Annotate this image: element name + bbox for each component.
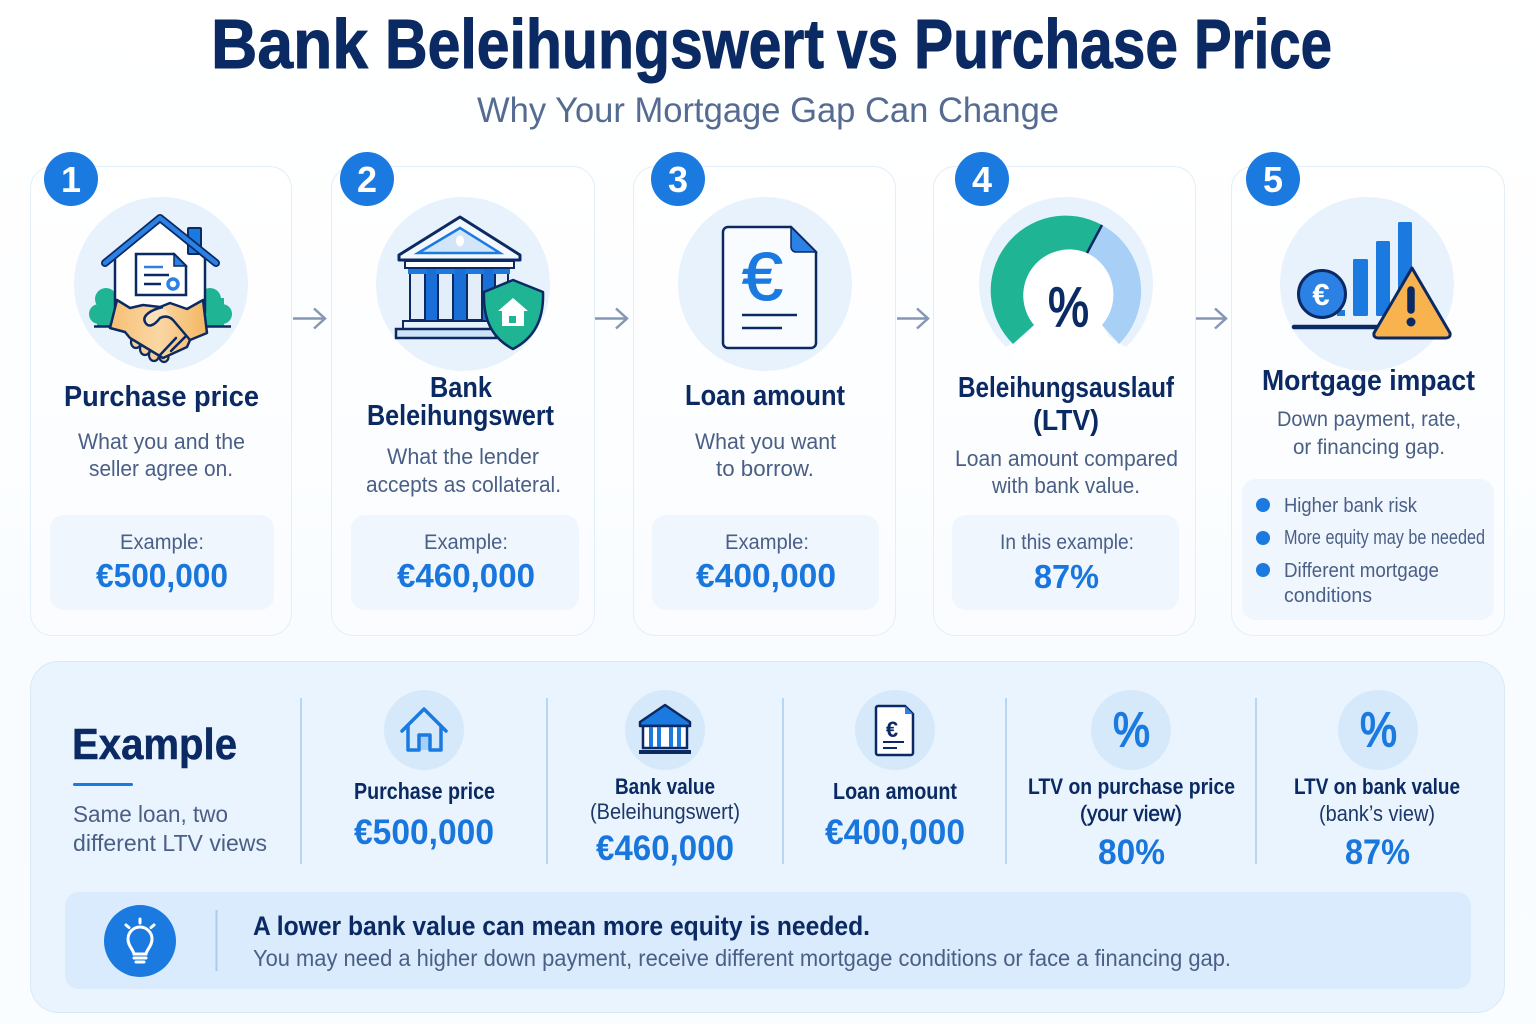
impact list: conditions: [1284, 585, 1372, 607]
title: Price: [1194, 5, 1332, 83]
example box: Example:: [424, 531, 508, 554]
example heading: Same loan, two: [73, 801, 228, 827]
arrow: [293, 308, 325, 328]
column: purchase price: [354, 690, 495, 852]
panel: step 2 bank beleihungswert: [332, 152, 594, 636]
panel: step 3 loan amount: [634, 152, 896, 636]
description: [78, 429, 245, 481]
icon: percent gauge: [979, 197, 1153, 362]
example box: [351, 515, 579, 610]
icon: light bulb: [104, 905, 176, 977]
subtitle: Why Your Mortgage Gap Can Change: [477, 91, 1059, 130]
title: vs: [837, 5, 898, 83]
title: Bank: [211, 5, 368, 83]
column: loan amount: [825, 690, 965, 852]
icon: euro document: €: [742, 239, 783, 315]
arrow: [897, 308, 928, 328]
callout text: You may need a higher down payment, receive different mortgage conditions or face a financing gap.: [253, 945, 1231, 971]
example box: €500,000: [96, 557, 228, 594]
column: LTV on bank value: [1294, 690, 1460, 872]
icon: house with handshake: [74, 197, 248, 371]
callout: [65, 892, 1471, 989]
column: LTV on purchase price: (your view): [1080, 801, 1182, 826]
heading: (LTV): [1033, 405, 1099, 437]
heading: Bank: [430, 372, 493, 404]
badge 3: [651, 152, 705, 206]
badge 4: 4: [972, 159, 992, 200]
column: bank value: (Beleihungswert): [590, 799, 740, 824]
example box: Example:: [725, 531, 809, 554]
impact list: [1242, 479, 1494, 620]
icon: euro document: [678, 197, 852, 371]
example box: Example:: [120, 531, 204, 554]
column: LTV on bank value: LTV on bank value: [1294, 774, 1460, 799]
description: [695, 429, 836, 481]
column: purchase price: €500,000: [354, 813, 494, 852]
callout text: A lower bank value can mean more equity is needed.: [253, 911, 870, 941]
example heading: Example: [72, 720, 237, 769]
example box: In this example:: [1000, 531, 1134, 554]
panel: step 4 LTV: [934, 152, 1196, 636]
example heading: [72, 720, 267, 856]
column: loan amount: €: [886, 717, 898, 742]
example box: [952, 515, 1179, 610]
column: LTV on bank value: %: [1360, 704, 1397, 757]
arrow: [1196, 308, 1226, 328]
column: LTV on purchase price: 80%: [1098, 833, 1165, 872]
badge 4: [955, 152, 1009, 206]
badge 1: 1: [61, 159, 81, 200]
badge 1: [44, 152, 98, 206]
column: LTV on purchase price: [1028, 690, 1235, 872]
impact list: Higher bank risk: [1284, 495, 1418, 517]
column: LTV on bank value: 87%: [1345, 833, 1410, 872]
heading: Mortgage impact: [1262, 365, 1475, 397]
heading: [367, 372, 554, 432]
arrow: [595, 308, 627, 328]
column: bank value: €460,000: [596, 829, 734, 868]
icon: rising bars, euro coin and warning: [1280, 197, 1454, 371]
example box: [652, 515, 879, 610]
description: [1277, 408, 1461, 459]
icon: percent gauge: %: [1048, 275, 1089, 338]
badge 2: [340, 152, 394, 206]
column: LTV on purchase price: LTV on purchase price: [1028, 774, 1235, 799]
panel: example summary: [30, 662, 1504, 1012]
panel: step 1 purchase price: [30, 152, 292, 636]
column: LTV on purchase price: %: [1113, 704, 1150, 757]
column: bank value: Bank value: [615, 774, 715, 799]
column: purchase price: Purchase price: [354, 778, 495, 804]
description: accepts as collateral.: [366, 472, 561, 497]
heading: Beleihungsauslauf: [958, 372, 1174, 404]
title: [211, 5, 1332, 83]
description: Loan amount compared: [955, 446, 1178, 471]
heading: [958, 372, 1174, 437]
callout text: [253, 911, 1231, 971]
heading: Purchase price: [64, 381, 259, 413]
heading: Loan amount: [685, 380, 845, 412]
example heading: different LTV views: [73, 830, 267, 856]
description: seller agree on.: [89, 456, 233, 481]
example box: €400,000: [696, 557, 836, 594]
icon: bank with shield: [376, 197, 550, 371]
example box: 87%: [1034, 558, 1099, 595]
description: or financing gap.: [1293, 436, 1445, 459]
description: to borrow.: [716, 456, 814, 481]
badge 5: [1246, 152, 1300, 206]
description: What you want: [695, 429, 836, 454]
description: Down payment, rate,: [1277, 408, 1461, 431]
description: [955, 446, 1178, 498]
description: [366, 444, 561, 497]
column: loan amount: €400,000: [825, 813, 965, 852]
description: with bank value.: [991, 473, 1140, 498]
title: Purchase: [914, 5, 1178, 83]
column: loan amount: Loan amount: [833, 778, 957, 804]
badge 2: 2: [357, 159, 377, 200]
example box: [50, 515, 274, 610]
heading: Beleihungswert: [367, 400, 554, 432]
column: bank value: [590, 690, 740, 868]
impact list: More equity may be needed: [1284, 527, 1485, 549]
column: LTV on bank value: (bank’s view): [1319, 801, 1435, 826]
badge 5: 5: [1263, 159, 1283, 200]
example box: €460,000: [397, 557, 535, 594]
icon: rising bars, euro coin and warning: €: [1312, 277, 1330, 312]
description: What the lender: [387, 444, 539, 469]
impact list: Different mortgage: [1284, 560, 1439, 582]
title: Beleihungswert: [385, 5, 824, 83]
description: What you and the: [78, 429, 245, 454]
badge 3: 3: [668, 159, 688, 200]
panel: step 5 mortgage impact: [1232, 152, 1504, 636]
